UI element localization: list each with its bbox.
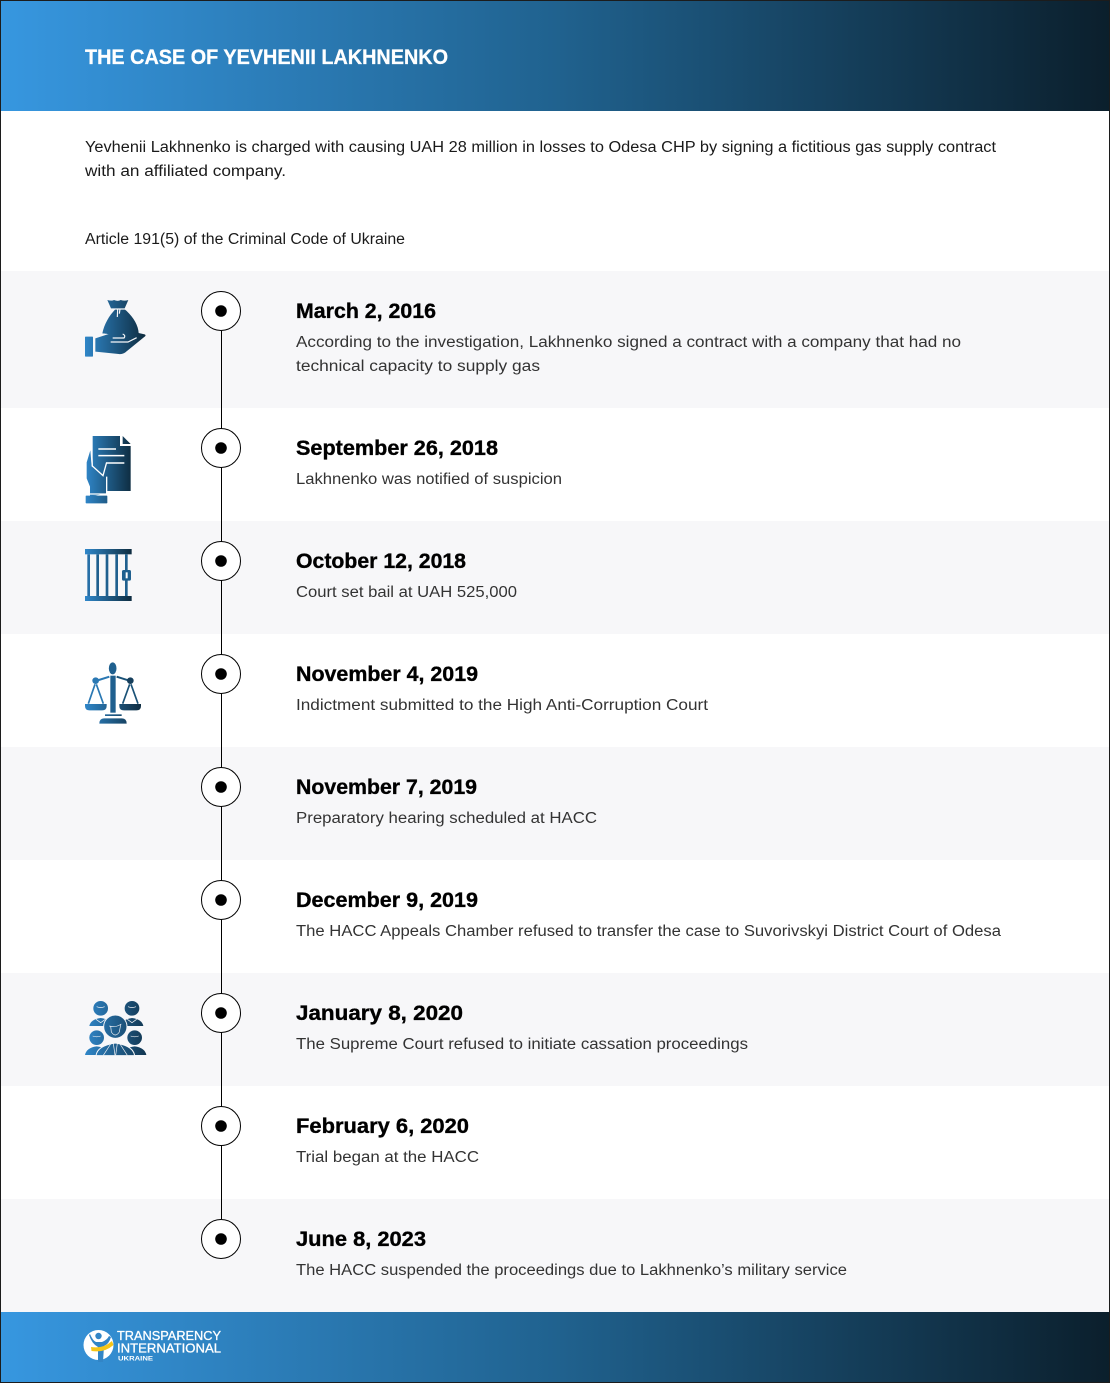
timeline text: March 2, 2016: technical capacity to supply gas [296, 358, 540, 375]
timeline text: March 2, 2016: March 2, 2016 [296, 300, 436, 323]
icon: hand holding document [86, 436, 131, 503]
logo: Transparency International Ukraine: UKRAINE [118, 1356, 154, 1362]
logo: Transparency International Ukraine: TRANSPARENCY [117, 1328, 221, 1343]
icon: prison bars [85, 549, 132, 601]
intro text: with an affiliated company. [84, 163, 286, 180]
timeline text: September 26, 2018 [296, 437, 562, 488]
timeline text: October 12, 2018 [296, 550, 517, 601]
timeline text: January 8, 2020 [296, 1002, 748, 1053]
legal article reference: Article 191(5) of the Criminal Code of Ukraine [85, 231, 405, 248]
marker: December 9, 2019 [202, 880, 240, 920]
marker: November 4, 2019 [202, 654, 240, 694]
logo: Transparency International Ukraine: INTERNATIONAL [117, 1340, 221, 1356]
intro text: Yevhenii Lakhnenko is charged with causing UAH 28 million in losses to Odesa CHP by signing a fictitious gas supply contract [85, 139, 997, 156]
timeline text: February 6, 2020 [296, 1115, 479, 1166]
intro text [84, 139, 997, 180]
marker: February 6, 2020 [202, 1106, 240, 1146]
timeline text: June 8, 2023 [296, 1228, 847, 1279]
timeline text: November 7, 2019: Preparatory hearing scheduled at HACC [296, 810, 597, 827]
timeline axis [202, 292, 240, 1258]
icon: group of people [85, 1001, 146, 1056]
timeline text: December 9, 2019: The HACC Appeals Chamber refused to transfer the case to Suvorivskyi District Court of Odesa [296, 923, 1001, 940]
timeline text: October 12, 2018: Court set bail at UAH 525,000 [296, 584, 517, 601]
logo: Transparency International Ukraine [84, 1328, 221, 1362]
timeline text: September 26, 2018: Lakhnenko was notified of suspicion [296, 471, 562, 488]
row backgrounds [0, 271, 1110, 1312]
timeline text: March 2, 2016: According to the investigation, Lakhnenko signed a contract with a company that had no [296, 334, 961, 351]
marker: September 26, 2018 [202, 428, 240, 468]
timeline text: September 26, 2018: September 26, 2018 [296, 437, 498, 460]
icon: money bag on hand [85, 300, 146, 357]
marker: June 8, 2023 [202, 1220, 240, 1258]
timeline text: June 8, 2023: June 8, 2023 [296, 1228, 426, 1251]
timeline text: January 8, 2020: January 8, 2020 [296, 1002, 463, 1025]
timeline text: February 6, 2020: Trial began at the HACC [296, 1149, 479, 1166]
timeline text: January 8, 2020: The Supreme Court refused to initiate cassation proceedings [296, 1036, 748, 1053]
timeline text: February 6, 2020: February 6, 2020 [296, 1115, 469, 1138]
timeline text: December 9, 2019 [296, 889, 1001, 940]
title: THE CASE OF YEVHENII LAKHNENKO [85, 46, 448, 69]
timeline text: November 7, 2019 [296, 776, 597, 827]
timeline text: November 4, 2019: November 4, 2019 [296, 663, 478, 686]
header banner [0, 0, 1110, 111]
timeline text: October 12, 2018: October 12, 2018 [296, 550, 466, 573]
timeline text: December 9, 2019: December 9, 2019 [296, 889, 478, 912]
marker: March 2, 2016 [202, 292, 240, 330]
timeline text: June 8, 2023: The HACC suspended the proceedings due to Lakhnenko’s military service [296, 1262, 847, 1279]
timeline text: November 4, 2019: Indictment submitted to the High Anti-Corruption Court [296, 697, 709, 714]
marker: October 12, 2018 [202, 542, 240, 580]
marker: January 8, 2020 [202, 994, 240, 1032]
icon: scales of justice [85, 662, 141, 724]
marker: November 7, 2019 [202, 768, 240, 806]
timeline text: November 7, 2019: November 7, 2019 [296, 776, 477, 799]
footer banner [0, 1312, 1110, 1383]
timeline text: March 2, 2016 [296, 300, 961, 375]
timeline text: November 4, 2019 [296, 663, 709, 714]
